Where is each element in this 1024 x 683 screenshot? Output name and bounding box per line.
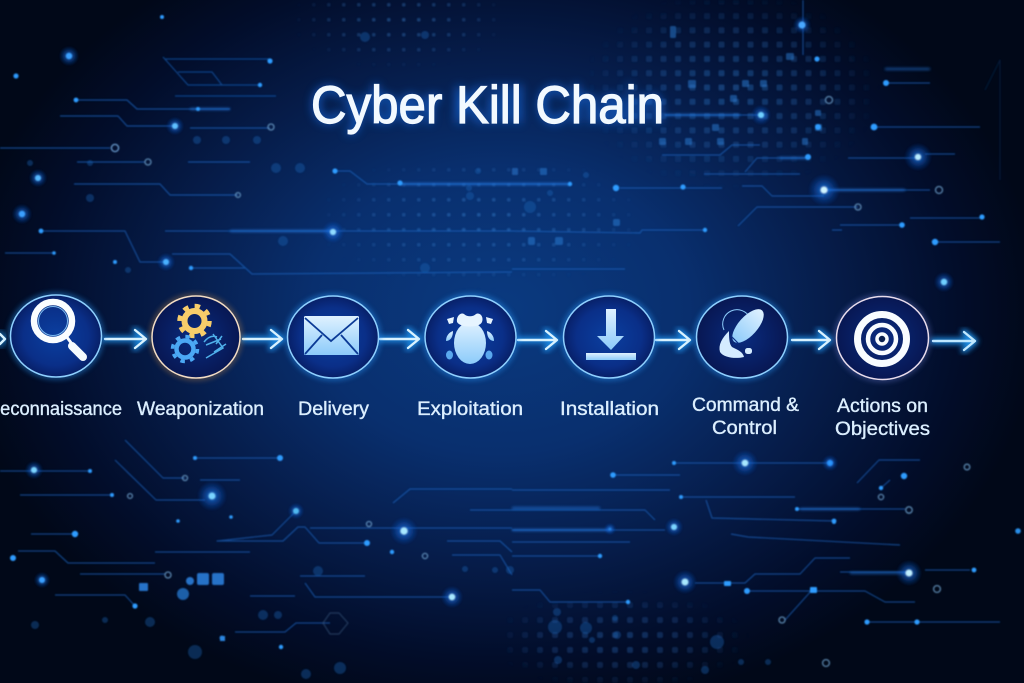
label: Command & xyxy=(692,395,799,416)
label: Installation xyxy=(560,399,659,420)
stage: reconnaissance xyxy=(0,295,122,420)
stage: exploitation xyxy=(417,296,523,420)
label: Actions on xyxy=(837,396,928,417)
icon: satellite dish xyxy=(719,304,769,358)
label: Objectives xyxy=(835,419,930,440)
label: Control xyxy=(712,418,777,439)
arrow: exploitation to installation xyxy=(518,331,557,349)
stage: installation xyxy=(560,296,659,420)
arrow: delivery to exploitation xyxy=(380,330,419,348)
stage: delivery xyxy=(288,296,378,420)
stage: actions on objectives xyxy=(835,296,930,440)
highlighted trace segments xyxy=(190,69,930,573)
arrow: incoming xyxy=(0,333,5,345)
label xyxy=(692,395,799,439)
icon: download arrow xyxy=(586,309,636,360)
rings xyxy=(111,96,970,666)
arrow: installation to command and control xyxy=(656,331,690,349)
arrow: command and control to actions xyxy=(792,331,830,349)
arrow: actions outgoing xyxy=(933,332,975,350)
title: Cyber Kill Chain xyxy=(311,76,664,135)
label: Delivery xyxy=(298,399,370,420)
stage: weaponization xyxy=(137,296,264,420)
stage: command and control xyxy=(692,296,799,439)
icon: bug xyxy=(446,313,494,364)
icon: gears and tools xyxy=(172,306,226,362)
arrow: reconnaissance to weaponization xyxy=(105,330,146,348)
label: Exploitation xyxy=(417,399,523,420)
label: Weaponization xyxy=(137,399,264,420)
icon: target xyxy=(858,314,906,364)
label xyxy=(835,396,930,440)
title: Cyber Kill Chain xyxy=(311,76,664,135)
arrows between stages xyxy=(0,330,975,350)
icon: envelope xyxy=(304,316,359,355)
icon: magnifying glass xyxy=(34,302,83,357)
glowing nodes xyxy=(12,16,954,608)
arrow: weaponization to delivery xyxy=(243,330,282,348)
